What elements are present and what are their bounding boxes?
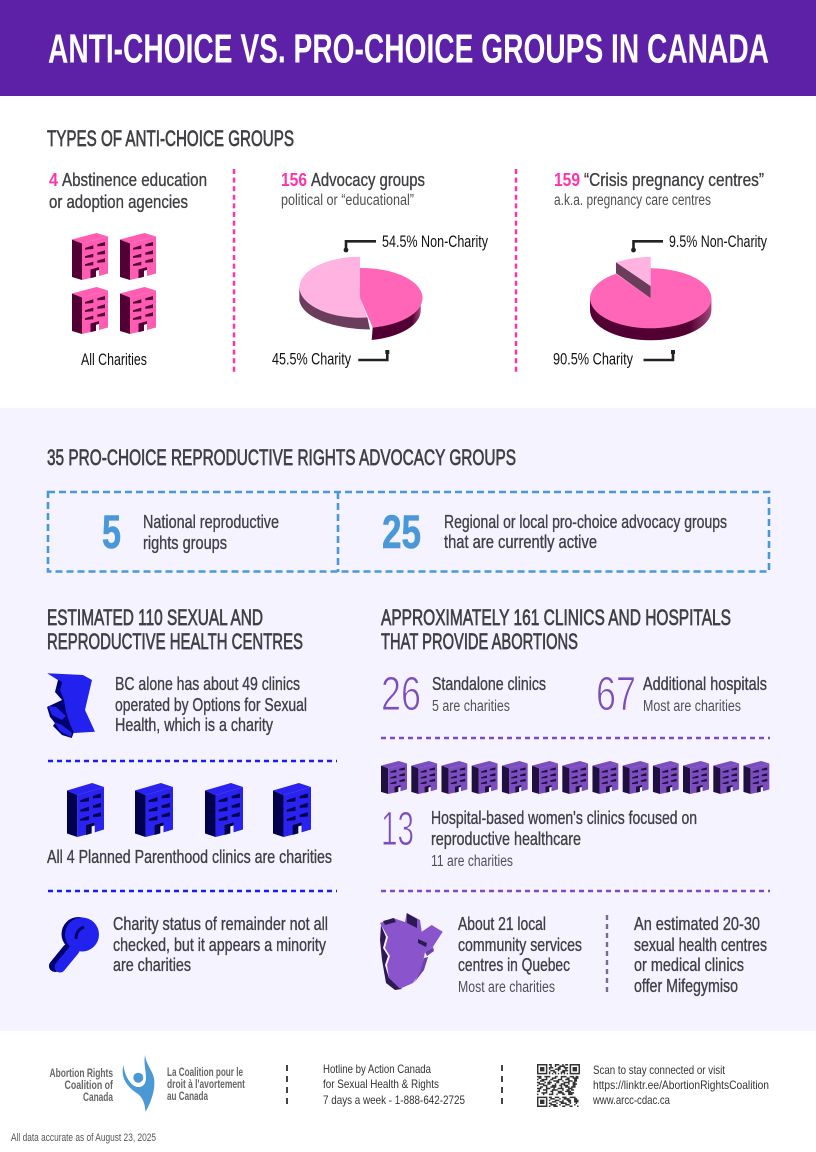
panel: pro-choice section background xyxy=(0,408,816,1031)
stat: 67 additional hospitals: Most are charities xyxy=(643,698,741,715)
pie chart: advocacy groups charity split xyxy=(299,257,423,340)
text: quebec community services centres: community services xyxy=(458,934,582,955)
icons: four pink charity buildings xyxy=(72,233,156,334)
icon: magnifying key xyxy=(55,917,99,967)
count: 4 abstinence education or adoption agencies: Abstinence education xyxy=(62,169,207,190)
stat: 5 national groups xyxy=(102,505,279,558)
count: 159 crisis pregnancy centres xyxy=(554,169,764,209)
text: quebec community services centres xyxy=(458,913,582,996)
caption: planned parenthood: All 4 Planned Parenthood clinics are charities xyxy=(47,846,332,867)
stat: 25 regional groups: Regional or local pro-choice advocacy groups xyxy=(444,511,727,532)
callout: 54.5% non-charity xyxy=(344,233,489,252)
heading: estimated 110 centres: REPRODUCTIVE HEALTH CENTRES xyxy=(47,629,303,654)
stat: 5 national groups: rights groups xyxy=(143,532,227,553)
count: 156 advocacy groups: Advocacy groups xyxy=(311,169,425,190)
pie chart: crisis pregnancy centres charity split xyxy=(590,257,711,340)
count: 159 crisis pregnancy centres: 159 xyxy=(554,169,580,190)
text: hotline xyxy=(323,1062,465,1107)
stat: 67 additional hospitals: 67 xyxy=(596,668,636,721)
text: mifegymiso providers: sexual health centres xyxy=(634,934,767,955)
count: 156 advocacy groups: 156 xyxy=(281,169,307,190)
logo: abortion rights coalition of canada xyxy=(50,1055,245,1112)
logo: abortion rights coalition of canada: droit à l'avortement xyxy=(167,1079,245,1091)
text: mifegymiso providers: An estimated 20-30 xyxy=(634,913,760,934)
text: scan to stay connected xyxy=(592,1063,769,1107)
column: advocacy groups xyxy=(272,169,489,368)
stat: 26 standalone clinics: 26 xyxy=(381,668,421,721)
text: hotline: 7 days a week - 1-888-642-2725 xyxy=(323,1093,465,1107)
count: 159 crisis pregnancy centres: “Crisis pregnancy centres” xyxy=(584,169,764,190)
stat: 25 regional groups xyxy=(382,505,727,558)
text: scan to stay connected: Scan to stay connected or visit xyxy=(593,1063,726,1077)
count: 159 crisis pregnancy centres: a.k.a. pregnancy care centres xyxy=(554,192,711,209)
text: quebec community services centres: centres in Quebec xyxy=(458,954,570,975)
header banner xyxy=(0,0,816,96)
text: hotline: Hotline by Action Canada xyxy=(323,1062,431,1076)
count: 4 abstinence education or adoption agencies: 4 xyxy=(49,169,59,190)
text: charity status of remainder: Charity status of remainder not all xyxy=(113,913,328,934)
heading: approximately 161 clinics and hospitals: THAT PROVIDE ABORTIONS xyxy=(381,629,578,654)
icons: thirteen purple hospital buildings xyxy=(381,761,769,794)
logo: abortion rights coalition of canada: Coalition of xyxy=(64,1080,113,1092)
text: hotline: for Sexual Health & Rights xyxy=(323,1077,439,1091)
logo: abortion rights coalition of canada: Canada xyxy=(83,1092,113,1104)
stat: 13 hospital-based women's clinics: reproductive healthcare xyxy=(431,828,581,849)
icon: british columbia map xyxy=(47,673,95,738)
count: 156 advocacy groups xyxy=(281,169,425,209)
stat: 25 regional groups: that are currently active xyxy=(444,531,597,552)
count: 4 abstinence education or adoption agencies: or adoption agencies xyxy=(49,191,188,212)
heading: estimated 110 centres: ESTIMATED 110 SEXUAL AND xyxy=(47,605,263,630)
callout: 45.5% charity: 45.5% Charity xyxy=(272,350,352,368)
text: bc clinics: Health, which is a charity xyxy=(115,714,274,735)
stat: 26 standalone clinics: 5 are charities xyxy=(432,698,510,715)
stat: 13 hospital-based women's clinics: 13 xyxy=(381,803,414,856)
stat: 26 standalone clinics xyxy=(381,668,546,721)
heading: estimated 110 centres xyxy=(47,605,303,654)
text: mifegymiso providers xyxy=(634,913,767,996)
callout: 90.5% charity: 90.5% Charity xyxy=(553,350,634,368)
stat: 5 national groups: 5 xyxy=(102,505,121,558)
panel: pro-choice advocacy groups xyxy=(47,445,769,572)
heading: approximately 161 clinics and hospitals xyxy=(381,605,731,654)
text: bc clinics: operated by Options for Sexual xyxy=(115,694,307,715)
text: quebec community services centres: About 21 local xyxy=(458,913,546,934)
column: crisis pregnancy centres xyxy=(553,169,768,368)
note: data date: All data accurate as of August 23, 2025 xyxy=(11,1132,156,1144)
caption: all charities: All Charities xyxy=(81,351,147,369)
panel: footer xyxy=(11,1055,769,1144)
text: scan to stay connected: www.arcc-cdac.ca xyxy=(592,1093,670,1107)
logo: abortion rights coalition of canada: au Canada xyxy=(167,1091,208,1103)
callout: 54.5% non-charity: 54.5% Non-Charity xyxy=(382,233,489,251)
callout: 9.5% non-charity xyxy=(631,233,768,252)
heading: 35 pro-choice advocacy groups: 35 PRO-CHOICE REPRODUCTIVE RIGHTS ADVOCACY GROUPS xyxy=(47,445,516,470)
icon: quebec map xyxy=(380,913,443,990)
stat: 67 additional hospitals xyxy=(596,668,767,721)
heading: types of anti-choice groups: TYPES OF ANTI-CHOICE GROUPS xyxy=(47,126,294,151)
text: bc clinics: BC alone has about 49 clinics xyxy=(115,673,300,694)
text: charity status of remainder: are charities xyxy=(113,954,191,975)
stat: 5 national groups: National reproductive xyxy=(143,511,279,532)
text: mifegymiso providers: or medical clinics xyxy=(634,954,744,975)
logo: abortion rights coalition of canada: Abortion Rights xyxy=(50,1068,113,1080)
stat: 26 standalone clinics: Standalone clinics xyxy=(432,673,546,694)
count: 156 advocacy groups: political or “educational” xyxy=(281,192,414,209)
text: charity status of remainder xyxy=(113,913,328,975)
text: bc clinics xyxy=(115,673,307,735)
text: charity status of remainder: checked, but it appears a minority xyxy=(113,934,327,955)
panel: clinics and hospitals that provide abortions xyxy=(380,605,770,996)
text: quebec community services centres: Most are charities xyxy=(458,979,555,996)
icon: qr code xyxy=(537,1064,580,1107)
text: scan to stay connected: https://linktr.ee/AbortionRightsCoalition xyxy=(593,1078,769,1092)
stat: 67 additional hospitals: Additional hospitals xyxy=(643,673,767,694)
logo: abortion rights coalition of canada: La Coalition pour le xyxy=(167,1067,243,1079)
callout: 9.5% non-charity: 9.5% Non-Charity xyxy=(669,233,768,251)
text: mifegymiso providers: offer Mifegymiso xyxy=(634,975,738,996)
column: abstinence and adoption agencies xyxy=(49,169,207,369)
stat: 25 regional groups: 25 xyxy=(382,505,421,558)
stat: 13 hospital-based women's clinics xyxy=(381,803,697,870)
icons: four blue planned parenthood buildings xyxy=(67,783,311,837)
panel: sexual and reproductive health centres xyxy=(47,605,337,975)
stat: 13 hospital-based women's clinics: Hospital-based women's clinics focused on xyxy=(431,807,697,828)
stat: 13 hospital-based women's clinics: 11 are charities xyxy=(431,853,513,870)
count: 4 abstinence education or adoption agencies xyxy=(49,169,207,212)
